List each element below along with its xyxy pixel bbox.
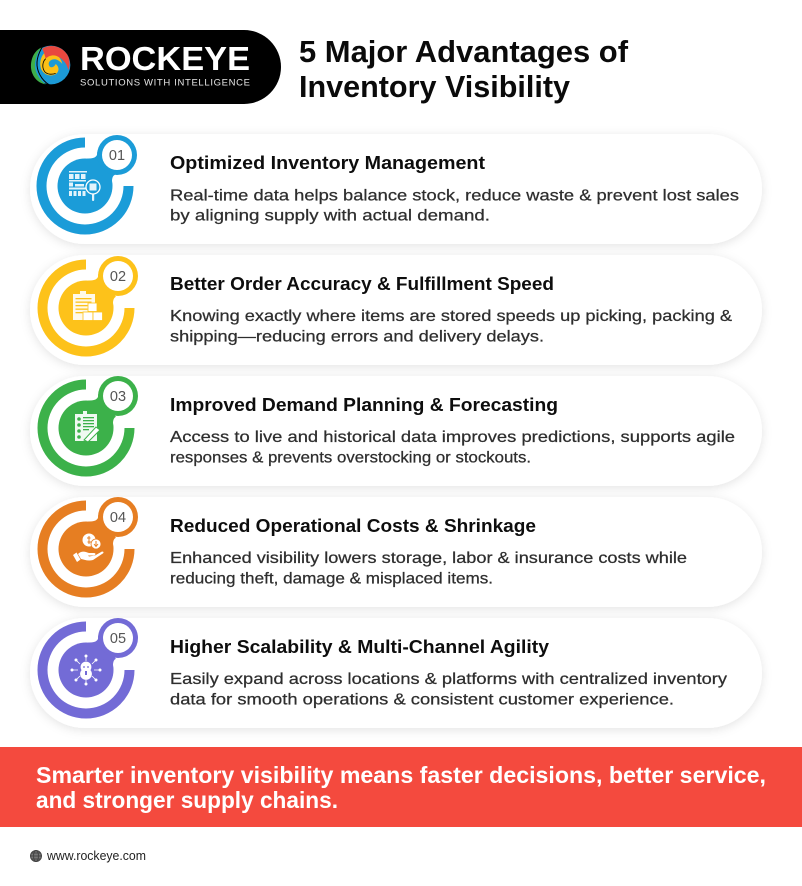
heading 01: Optimized Inventory Management bbox=[170, 152, 485, 173]
number 03: 03 bbox=[110, 389, 126, 405]
heading 03: Improved Demand Planning & Forecasting bbox=[170, 394, 558, 415]
body 05: data for smooth operations & consistent customer experience. bbox=[170, 692, 674, 708]
body 04: Enhanced visibility lowers storage, labor & insurance costs while bbox=[170, 550, 687, 567]
body 01: Real-time data helps balance stock, reduce waste & prevent lost sales bbox=[170, 188, 739, 204]
icon: checklist clipboard with pen bbox=[75, 411, 100, 442]
footer website bbox=[30, 848, 146, 863]
icon: globe bbox=[30, 850, 42, 862]
panel: 04 reduced operational costs bbox=[30, 497, 762, 607]
panel: 02 better order accuracy bbox=[30, 255, 762, 365]
emblem 05 bbox=[42, 618, 138, 714]
title bbox=[299, 34, 629, 104]
icon: rockeye swirl logo bbox=[31, 46, 70, 85]
number 05: 05 bbox=[110, 631, 126, 647]
logo tagline: SOLUTIONS WITH INTELLIGENCE bbox=[80, 78, 250, 88]
body 02 bbox=[170, 308, 732, 346]
number 02: 02 bbox=[110, 269, 126, 285]
body 01: by aligning supply with actual demand. bbox=[170, 208, 490, 224]
body 04: reducing theft, damage & misplaced items. bbox=[170, 570, 493, 588]
heading 05: Higher Scalability & Multi-Channel Agility bbox=[170, 636, 550, 657]
icon: network hub bbox=[71, 655, 101, 685]
number 04: 04 bbox=[110, 510, 126, 526]
heading 04: Reduced Operational Costs & Shrinkage bbox=[170, 515, 536, 536]
emblem 04 bbox=[42, 497, 138, 592]
banner text: Smarter inventory visibility means faster decisions, better service, bbox=[36, 762, 766, 788]
header logo pill bbox=[0, 30, 281, 104]
panel: 03 improved demand planning bbox=[30, 376, 762, 486]
body 02: Knowing exactly where items are stored speeds up picking, packing & bbox=[170, 308, 732, 325]
body 02: shipping—reducing errors and delivery delays. bbox=[170, 328, 544, 346]
website url: www.rockeye.com bbox=[46, 848, 146, 863]
emblem 02 bbox=[42, 256, 138, 352]
body 03: Access to live and historical data improves predictions, supports agile bbox=[170, 429, 735, 446]
body 04 bbox=[170, 550, 687, 588]
panel: 01 optimized inventory management bbox=[30, 134, 762, 244]
title: 5 Major Advantages of bbox=[299, 34, 629, 69]
panel: 05 higher scalability bbox=[30, 618, 762, 728]
closing banner bbox=[0, 747, 802, 827]
icon: clipboard with boxes bbox=[73, 291, 102, 320]
heading 02: Better Order Accuracy & Fulfillment Speed bbox=[170, 273, 554, 294]
body 05: Easily expand across locations & platforms with centralized inventory bbox=[170, 671, 727, 688]
emblem 01 bbox=[42, 135, 137, 230]
icon: warehouse shelf with magnifier bbox=[69, 171, 100, 201]
logo wordmark: ROCKEYE bbox=[80, 40, 250, 77]
banner text: and stronger supply chains. bbox=[36, 787, 338, 813]
banner text bbox=[36, 762, 766, 813]
body 03 bbox=[170, 429, 735, 466]
body 01 bbox=[170, 188, 739, 224]
icon: hand with coins bbox=[73, 534, 104, 562]
body 03: responses & prevents overstocking or stockouts. bbox=[170, 450, 531, 466]
body 05 bbox=[170, 671, 727, 708]
emblem 03 bbox=[42, 376, 138, 472]
number 01: 01 bbox=[109, 148, 125, 164]
title: Inventory Visibility bbox=[299, 69, 571, 104]
